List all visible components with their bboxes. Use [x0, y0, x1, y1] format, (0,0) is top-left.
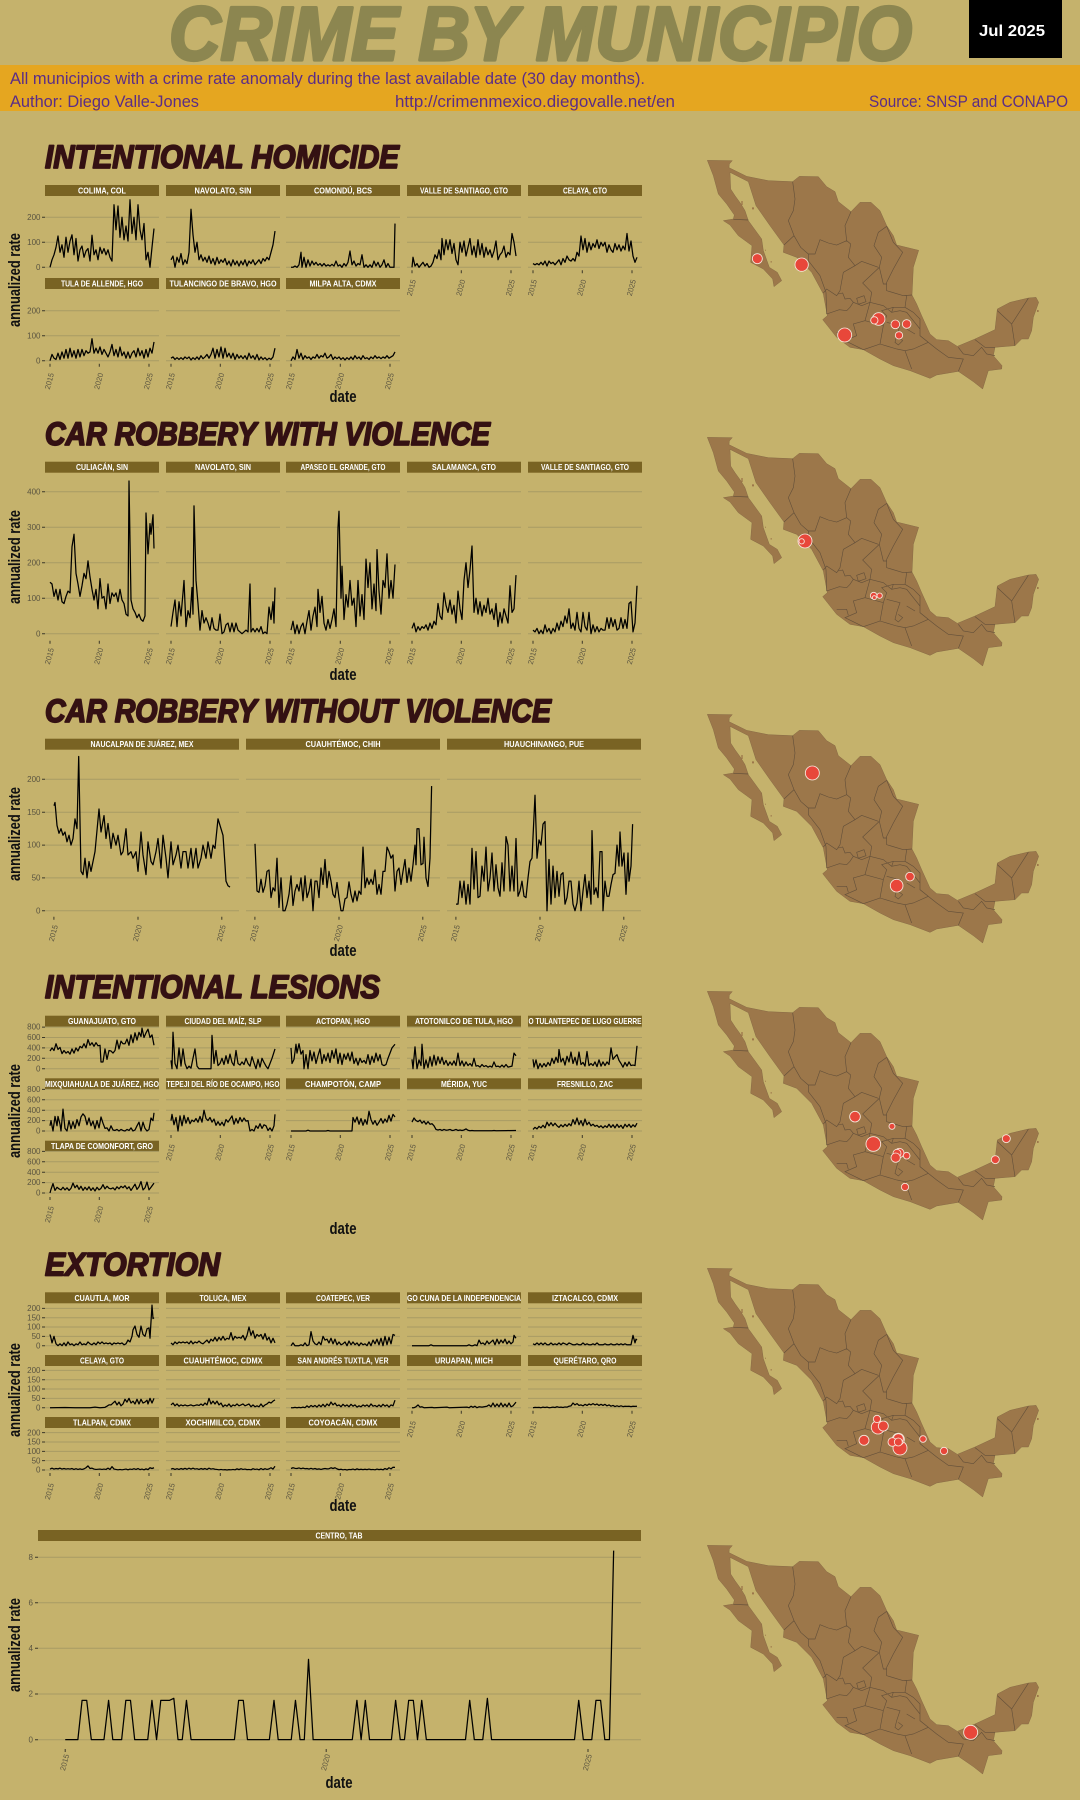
panel: Milpa Alta: 2025 — [383, 372, 396, 390]
panel: Uruapan: 2015 — [405, 1420, 418, 1438]
panel: Cuautla: 0 — [36, 1341, 41, 1350]
panel: Culiacan: 100 — [27, 594, 41, 603]
panel: Naucalpan: 200 — [27, 775, 41, 784]
panel: Tula de Allende: 100 — [27, 331, 41, 340]
panel: Colima: 0 — [36, 263, 41, 272]
panel: Naucalpan: NAUCALPAN DE JUÁREZ, MEX — [90, 739, 194, 749]
panel: Cuauhtemoc CDMX: CUAUHTÉMOC, CDMX — [184, 1355, 263, 1365]
panel: Coyoacan: 2015 — [284, 1482, 297, 1501]
panel: Tlapa de Comonfort: 0 — [36, 1189, 41, 1198]
section: extortion — [5, 1247, 642, 1515]
x axis title: date — [330, 941, 356, 960]
panel: Valle de Santiago: 2025 — [504, 278, 517, 297]
panel: Tulancingo de Bravo — [164, 278, 280, 390]
map: car robbery with violence — [707, 437, 1039, 666]
panel: Culiacan: CULIACÁN, SIN — [76, 462, 128, 472]
panel: Valle de Santiago: 2015 — [405, 278, 418, 297]
panel: Fresnillo: 2020 — [575, 1143, 588, 1162]
panel: Actopan — [286, 1016, 400, 1069]
panel: Tlapa de Comonfort: 800 — [27, 1147, 41, 1156]
panel: Apaseo el Grande — [284, 462, 400, 665]
panel: Tula de Allende — [27, 278, 159, 390]
panel: Atotonilco de Tula — [407, 1016, 521, 1069]
panel: Champoton: 2015 — [284, 1143, 297, 1162]
panel: Milpa Alta — [284, 278, 400, 390]
panel: Merida: 2020 — [454, 1143, 467, 1162]
panel: Valle de Santiago: VALLE DE SANTIAGO, GTO — [420, 185, 508, 195]
panel: Queretaro: 2025 — [625, 1420, 638, 1438]
panel: Navolato — [166, 185, 280, 267]
panel: Queretaro — [526, 1355, 642, 1438]
panel: Guanajuato: 400 — [27, 1043, 41, 1052]
panel: Tula de Allende: 200 — [27, 306, 41, 315]
panel: Navolato: NAVOLATO, SIN — [194, 185, 252, 195]
panel: Tlalpan: 150 — [27, 1438, 41, 1447]
panel: Huauchinango: 2015 — [449, 924, 462, 942]
header band — [0, 65, 1080, 111]
panel: Celaya: 150 — [27, 1375, 41, 1384]
map: intentional lesions — [707, 991, 1039, 1220]
panel: Xochimilco: 2020 — [213, 1482, 226, 1501]
panel: Naucalpan: 50 — [32, 874, 41, 883]
panel: Guanajuato: 600 — [27, 1033, 41, 1042]
panel: Tlapa de Comonfort: 600 — [27, 1157, 41, 1166]
panel: Culiacan: 300 — [27, 523, 41, 532]
y axis title: annualized rate — [5, 510, 24, 604]
panel: Cuautla: 200 — [27, 1304, 41, 1313]
y axis title: annualized rate — [5, 1064, 24, 1158]
x axis title: date — [330, 1496, 356, 1515]
panel: Comondu — [286, 184, 400, 267]
panel: Valle de Santiago — [405, 185, 521, 297]
panel: Naucalpan — [27, 739, 239, 942]
panel: Huauchinango — [447, 739, 641, 942]
panel: Celaya: 2015 — [526, 278, 539, 297]
panel: Queretaro: QUERÉTARO, QRO — [554, 1355, 617, 1365]
panel: Coyoacan: 2025 — [383, 1482, 396, 1501]
x axis title: date — [330, 1219, 356, 1238]
header band: http://crimenmexico.diegovalle.net/en — [395, 92, 675, 111]
panel: Salamanca — [405, 462, 521, 665]
panel: Mixquiahuala de Juarez: 800 — [27, 1085, 41, 1094]
panel: Tlalpan: 50 — [32, 1456, 41, 1465]
panel: Centro: 0 — [29, 1735, 34, 1744]
panel: Tulancingo de Bravo: 2015 — [164, 372, 177, 390]
panel: Culiacan: 2025 — [142, 647, 155, 665]
panel: Tlapa de Comonfort: 2025 — [142, 1205, 155, 1224]
panel: Merida: 2015 — [405, 1143, 418, 1162]
panel: Navolato — [164, 462, 280, 665]
heading: INTENTIONAL HOMICIDE — [45, 139, 401, 175]
panel: Celaya: 2025 — [625, 278, 638, 297]
panel: Tlalpan: 100 — [27, 1447, 41, 1456]
panel: Centro: 2 — [29, 1690, 34, 1699]
panel: Xochimilco: XOCHIMILCO, CDMX — [186, 1418, 261, 1428]
section: car robbery without violence — [5, 693, 641, 960]
panel: Toluca — [166, 1292, 280, 1346]
panel: Tulancingo de Bravo: TULANCINGO DE BRAVO, HGO — [170, 279, 277, 289]
panel: Tulancingo de Bravo: 2025 — [263, 372, 276, 390]
panel: Tlalpan: 2025 — [142, 1482, 155, 1501]
panel: Salamanca: 2025 — [504, 647, 517, 665]
header band: Author: Diego Valle-Jones — [10, 92, 199, 111]
panel: Culiacan: 2020 — [92, 647, 105, 665]
panel: Navolato: 2020 — [213, 647, 226, 665]
panel: Mixquiahuala de Juarez — [27, 1078, 159, 1136]
panel: Naucalpan: 2015 — [47, 924, 60, 942]
panel: Celaya: 100 — [27, 1385, 41, 1394]
panel: Celaya: CELAYA, GTO — [563, 185, 607, 195]
heading: INTENTIONAL LESIONS — [45, 969, 381, 1005]
panel: Valle de Santiago: 2025 — [625, 647, 638, 665]
panel: Champoton: 2020 — [333, 1143, 346, 1162]
panel: Apaseo el Grande: 2015 — [284, 647, 297, 665]
panel: Cuauhtemoc Chih: 2025 — [416, 924, 429, 942]
panel: Naucalpan: 2025 — [215, 924, 228, 942]
panel: Cuautla: CUAUTLA, MOR — [74, 1293, 130, 1303]
panel: Tula de Allende: TULA DE ALLENDE, HGO — [61, 279, 143, 289]
panel: Centro: 4 — [29, 1644, 34, 1653]
x axis title: date — [330, 387, 356, 406]
panel: Salamanca: SALAMANCA, GTO — [432, 462, 496, 472]
panel: Salamanca: 2020 — [454, 647, 467, 665]
panel: Tepeji del Rio de Ocampo: 2020 — [213, 1143, 226, 1162]
y axis title: annualized rate — [5, 787, 24, 881]
panel: Tepeji del Rio de Ocampo: 2025 — [263, 1143, 276, 1162]
panel: Tlapa de Comonfort: 2020 — [92, 1205, 105, 1224]
panel: Atotonilco de Tula: ATOTONILCO DE TULA, HGO — [415, 1016, 513, 1026]
section: Centro, Tabasco — [5, 1530, 641, 1792]
heading: CAR ROBBERY WITHOUT VIOLENCE — [45, 693, 552, 729]
panel: Champoton — [284, 1078, 400, 1162]
panel: Celaya: 200 — [27, 1366, 41, 1375]
panel: Celaya: 2020 — [575, 278, 588, 297]
panel: Culiacan — [27, 462, 159, 665]
panel: Culiacan: 2015 — [43, 647, 56, 665]
panel: San Andres Tuxtla — [286, 1355, 400, 1408]
panel: Fresnillo: 2025 — [625, 1143, 638, 1162]
panel: Valle de Santiago — [526, 462, 642, 665]
panel: Champoton: CHAMPOTÓN, CAMP — [305, 1078, 381, 1089]
panel: Centro: 6 — [29, 1598, 34, 1607]
panel: Tlalpan: TLALPAN, CDMX — [73, 1418, 131, 1428]
panel: Coyoacan: COYOACÁN, CDMX — [308, 1418, 378, 1428]
panel: Coyoacan — [284, 1417, 400, 1501]
map: intentional homicide — [707, 160, 1039, 389]
map: Centro, Tabasco — [707, 1545, 1039, 1774]
panel: Santiago Tulantepec — [528, 1016, 642, 1069]
panel: Apaseo el Grande: 2020 — [333, 647, 346, 665]
panel: Cuauhtemoc CDMX — [166, 1355, 280, 1408]
panel: Fresnillo: 2015 — [526, 1143, 539, 1162]
panel: Huauchinango: HUAUCHINANGO, PUE — [504, 739, 584, 749]
section: intentional homicide — [5, 139, 642, 406]
panel: Celaya: 50 — [32, 1394, 41, 1403]
panel: Xochimilco: 2015 — [164, 1482, 177, 1501]
panel: Tula de Allende: 2025 — [142, 372, 155, 390]
panel: Colima — [27, 185, 159, 272]
panel: Cuautla: 150 — [27, 1313, 41, 1322]
panel: Navolato: 2015 — [164, 647, 177, 665]
panel: Queretaro: 2020 — [575, 1420, 588, 1438]
panel: Culiacan: 0 — [36, 629, 41, 638]
panel: Ciudad del Maiz — [166, 1016, 280, 1069]
panel: Tlapa de Comonfort: 2015 — [43, 1205, 56, 1224]
panel: Milpa Alta: 2020 — [333, 372, 346, 390]
panel: Merida — [405, 1078, 521, 1162]
panel: Tlapa de Comonfort: TLAPA DE COMONFORT, GRO — [51, 1141, 153, 1151]
panel: Tula de Allende: 2020 — [92, 372, 105, 390]
panel: Fresnillo — [526, 1078, 642, 1162]
panel: Mixquiahuala de Juarez: MIXQUIAHUALA DE JUÁREZ, HGO — [45, 1079, 159, 1089]
panel: Culiacan: 200 — [27, 558, 41, 567]
panel: Tepeji del Rio de Ocampo — [164, 1078, 280, 1162]
panel: Mixquiahuala de Juarez: 0 — [36, 1127, 41, 1136]
panel: Navolato: 2025 — [263, 647, 276, 665]
panel: Naucalpan: 150 — [27, 808, 41, 817]
panel: Santiago Tulantepec: O TULANTEPEC DE LUGO GUERRE — [528, 1016, 642, 1026]
panel: Naucalpan: 0 — [36, 906, 41, 915]
panel: Huauchinango: 2025 — [617, 924, 630, 942]
panel: Cuauhtemoc Chih: 2020 — [332, 924, 345, 942]
panel: Colima: 200 — [27, 213, 41, 222]
panel: Mixquiahuala de Juarez: 600 — [27, 1095, 41, 1104]
panel: Tlapa de Comonfort — [27, 1141, 159, 1224]
panel: Cuauhtemoc Chih: 2015 — [248, 924, 261, 942]
map: car robbery without violence — [707, 714, 1039, 943]
date badge: Jul 2025 — [979, 23, 1045, 40]
panel: Valle de Santiago: 2020 — [575, 647, 588, 665]
panel: Celaya — [526, 185, 642, 297]
panel: Dolores Hidalgo: GO CUNA DE LA INDEPENDENCIA — [407, 1293, 521, 1303]
panel: Tepeji del Rio de Ocampo: TEPEJI DEL RÍO DE OCAMPO, HGO — [166, 1079, 280, 1089]
panel: Guanajuato: 200 — [27, 1054, 41, 1063]
y axis title: annualized rate — [5, 1343, 24, 1437]
panel: Tlalpan: 2015 — [43, 1482, 56, 1501]
panel: Huauchinango: 2020 — [533, 924, 546, 942]
panel: Iztacalco: IZTACALCO, CDMX — [552, 1293, 618, 1303]
panel: Champoton: 2025 — [383, 1143, 396, 1162]
y axis title: annualized rate — [5, 233, 24, 327]
panel: Comondu: COMONDÚ, BCS — [314, 184, 372, 195]
panel: Apaseo el Grande: APASEO EL GRANDE, GTO — [300, 462, 386, 472]
panel: Tlalpan: 0 — [36, 1466, 41, 1475]
panel: Centro: CENTRO, TAB — [316, 1530, 362, 1540]
panel: Merida: MÉRIDA, YUC — [441, 1079, 487, 1089]
panel: Tlalpan — [27, 1417, 159, 1501]
panel: Iztacalco — [528, 1292, 642, 1346]
panel: Xochimilco: 2025 — [263, 1482, 276, 1501]
panel: Mixquiahuala de Juarez: 400 — [27, 1106, 41, 1115]
panel: Centro: 2025 — [581, 1753, 594, 1772]
panel: Apaseo el Grande: 2025 — [383, 647, 396, 665]
panel: Culiacan: 400 — [27, 487, 41, 496]
x axis title: date — [330, 665, 356, 684]
panel: Dolores Hidalgo — [407, 1292, 521, 1346]
panel: Guanajuato: GUANAJUATO, GTO — [68, 1016, 136, 1026]
panel: Coyoacan: 2020 — [333, 1482, 346, 1501]
panel: Xochimilco — [164, 1417, 280, 1501]
panel: Cuauhtemoc Chih: CUAUHTÉMOC, CHIH — [306, 739, 380, 749]
panel: Queretaro: 2015 — [526, 1420, 539, 1438]
panel: Naucalpan: 100 — [27, 841, 41, 850]
panel: Centro — [29, 1530, 641, 1772]
panel: Colima: 100 — [27, 238, 41, 247]
panel: Valle de Santiago: 2015 — [526, 647, 539, 665]
header band: All municipios with a crime rate anomaly during the last available date (30 day months). — [10, 69, 645, 88]
panel: Tula de Allende: 2015 — [43, 372, 56, 390]
panel: Colima: COLIMA, COL — [78, 185, 126, 195]
panel: Celaya: CELAYA, GTO — [80, 1355, 124, 1365]
panel: Tulancingo de Bravo: 2020 — [213, 372, 226, 390]
date badge — [969, 0, 1062, 58]
panel: Milpa Alta: 2015 — [284, 372, 297, 390]
heading: CAR ROBBERY WITH VIOLENCE — [45, 416, 491, 452]
panel: Cuautla: 100 — [27, 1323, 41, 1332]
panel: Cuautla — [27, 1292, 159, 1350]
panel: Merida: 2025 — [504, 1143, 517, 1162]
panel: Centro: 2015 — [58, 1753, 71, 1772]
panel: Guanajuato: 0 — [36, 1064, 41, 1073]
panel: Uruapan: 2020 — [454, 1420, 467, 1438]
panel: Salamanca: 2015 — [405, 647, 418, 665]
panel: Celaya: 0 — [36, 1403, 41, 1412]
panel: Cuauhtemoc Chih — [246, 739, 440, 942]
panel: Cuautla: 50 — [32, 1332, 41, 1341]
panel: Coatepec — [286, 1292, 400, 1346]
panel: Uruapan — [405, 1355, 521, 1438]
x axis title: date — [326, 1773, 352, 1792]
panel: Tula de Allende: 0 — [36, 356, 41, 365]
y axis title: annualized rate — [5, 1598, 24, 1692]
panel: Uruapan: 2025 — [504, 1420, 517, 1438]
panel: Actopan: ACTOPAN, HGO — [316, 1016, 370, 1026]
panel: Guanajuato — [27, 1016, 159, 1073]
panel: Tepeji del Rio de Ocampo: 2015 — [164, 1143, 177, 1162]
section: car robbery with violence — [5, 416, 642, 684]
heading: EXTORTION — [45, 1247, 221, 1283]
panel: Celaya — [27, 1355, 159, 1412]
panel: Tlalpan: 2020 — [92, 1482, 105, 1501]
panel: Guanajuato: 800 — [27, 1023, 41, 1032]
panel: Naucalpan: 2020 — [131, 924, 144, 942]
panel: Tlapa de Comonfort: 400 — [27, 1168, 41, 1177]
panel: Toluca: TOLUCA, MEX — [200, 1293, 247, 1303]
panel: Centro: 8 — [29, 1553, 34, 1562]
panel: Milpa Alta: MILPA ALTA, CDMX — [310, 279, 377, 289]
panel: Coatepec: COATEPEC, VER — [316, 1293, 370, 1303]
panel: Navolato: NAVOLATO, SIN — [195, 462, 251, 472]
panel: Fresnillo: FRESNILLO, ZAC — [557, 1079, 613, 1089]
panel: Tlapa de Comonfort: 200 — [27, 1178, 41, 1187]
panel: Valle de Santiago: VALLE DE SANTIAGO, GTO — [541, 462, 629, 472]
panel: Valle de Santiago: 2020 — [454, 278, 467, 297]
panel: Tlalpan: 200 — [27, 1428, 41, 1437]
panel: Ciudad del Maiz: CIUDAD DEL MAÍZ, SLP — [184, 1016, 262, 1026]
panel: Centro: 2020 — [319, 1753, 332, 1772]
panel: Uruapan: URUAPAN, MICH — [435, 1355, 493, 1365]
panel: San Andres Tuxtla: SAN ANDRÉS TUXTLA, VER — [298, 1355, 388, 1365]
panel: Mixquiahuala de Juarez: 200 — [27, 1116, 41, 1125]
section: intentional lesions — [5, 969, 642, 1238]
map: extortion — [707, 1268, 1039, 1497]
